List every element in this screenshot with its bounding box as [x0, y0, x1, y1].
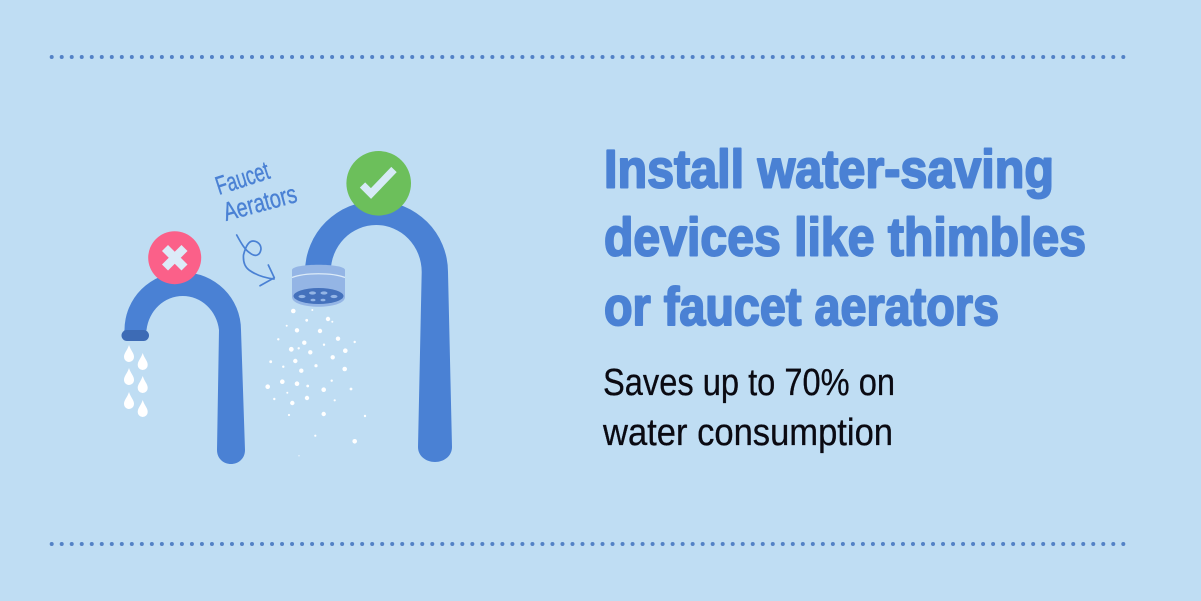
subheading: Saves up to 70% on	[603, 362, 895, 404]
faucet pipe: right	[305, 201, 452, 462]
badge: green check	[346, 151, 411, 216]
subheading: water consumption	[602, 412, 893, 454]
heading	[604, 140, 1086, 337]
heading: or faucet aerators	[604, 277, 999, 337]
water spray	[265, 309, 366, 457]
heading: Install water-saving	[604, 140, 1054, 200]
arrow: curly pointer to aerator	[237, 235, 274, 286]
illustration: dripping faucet without aerator	[122, 231, 245, 464]
handwritten label: Faucet Aerators: Aerators	[220, 178, 300, 227]
heading: devices like thimbles	[604, 208, 1086, 268]
faucet collar	[122, 330, 149, 341]
illustration: faucet with aerator	[265, 151, 452, 462]
aerator	[292, 265, 345, 307]
faucet pipe: left	[124, 272, 245, 464]
handwritten label: Faucet Aerators: Faucet	[212, 155, 274, 201]
water drops	[124, 345, 148, 417]
subheading	[602, 362, 895, 454]
badge: red cross	[148, 231, 201, 284]
handwritten label: Faucet Aerators	[212, 155, 300, 227]
